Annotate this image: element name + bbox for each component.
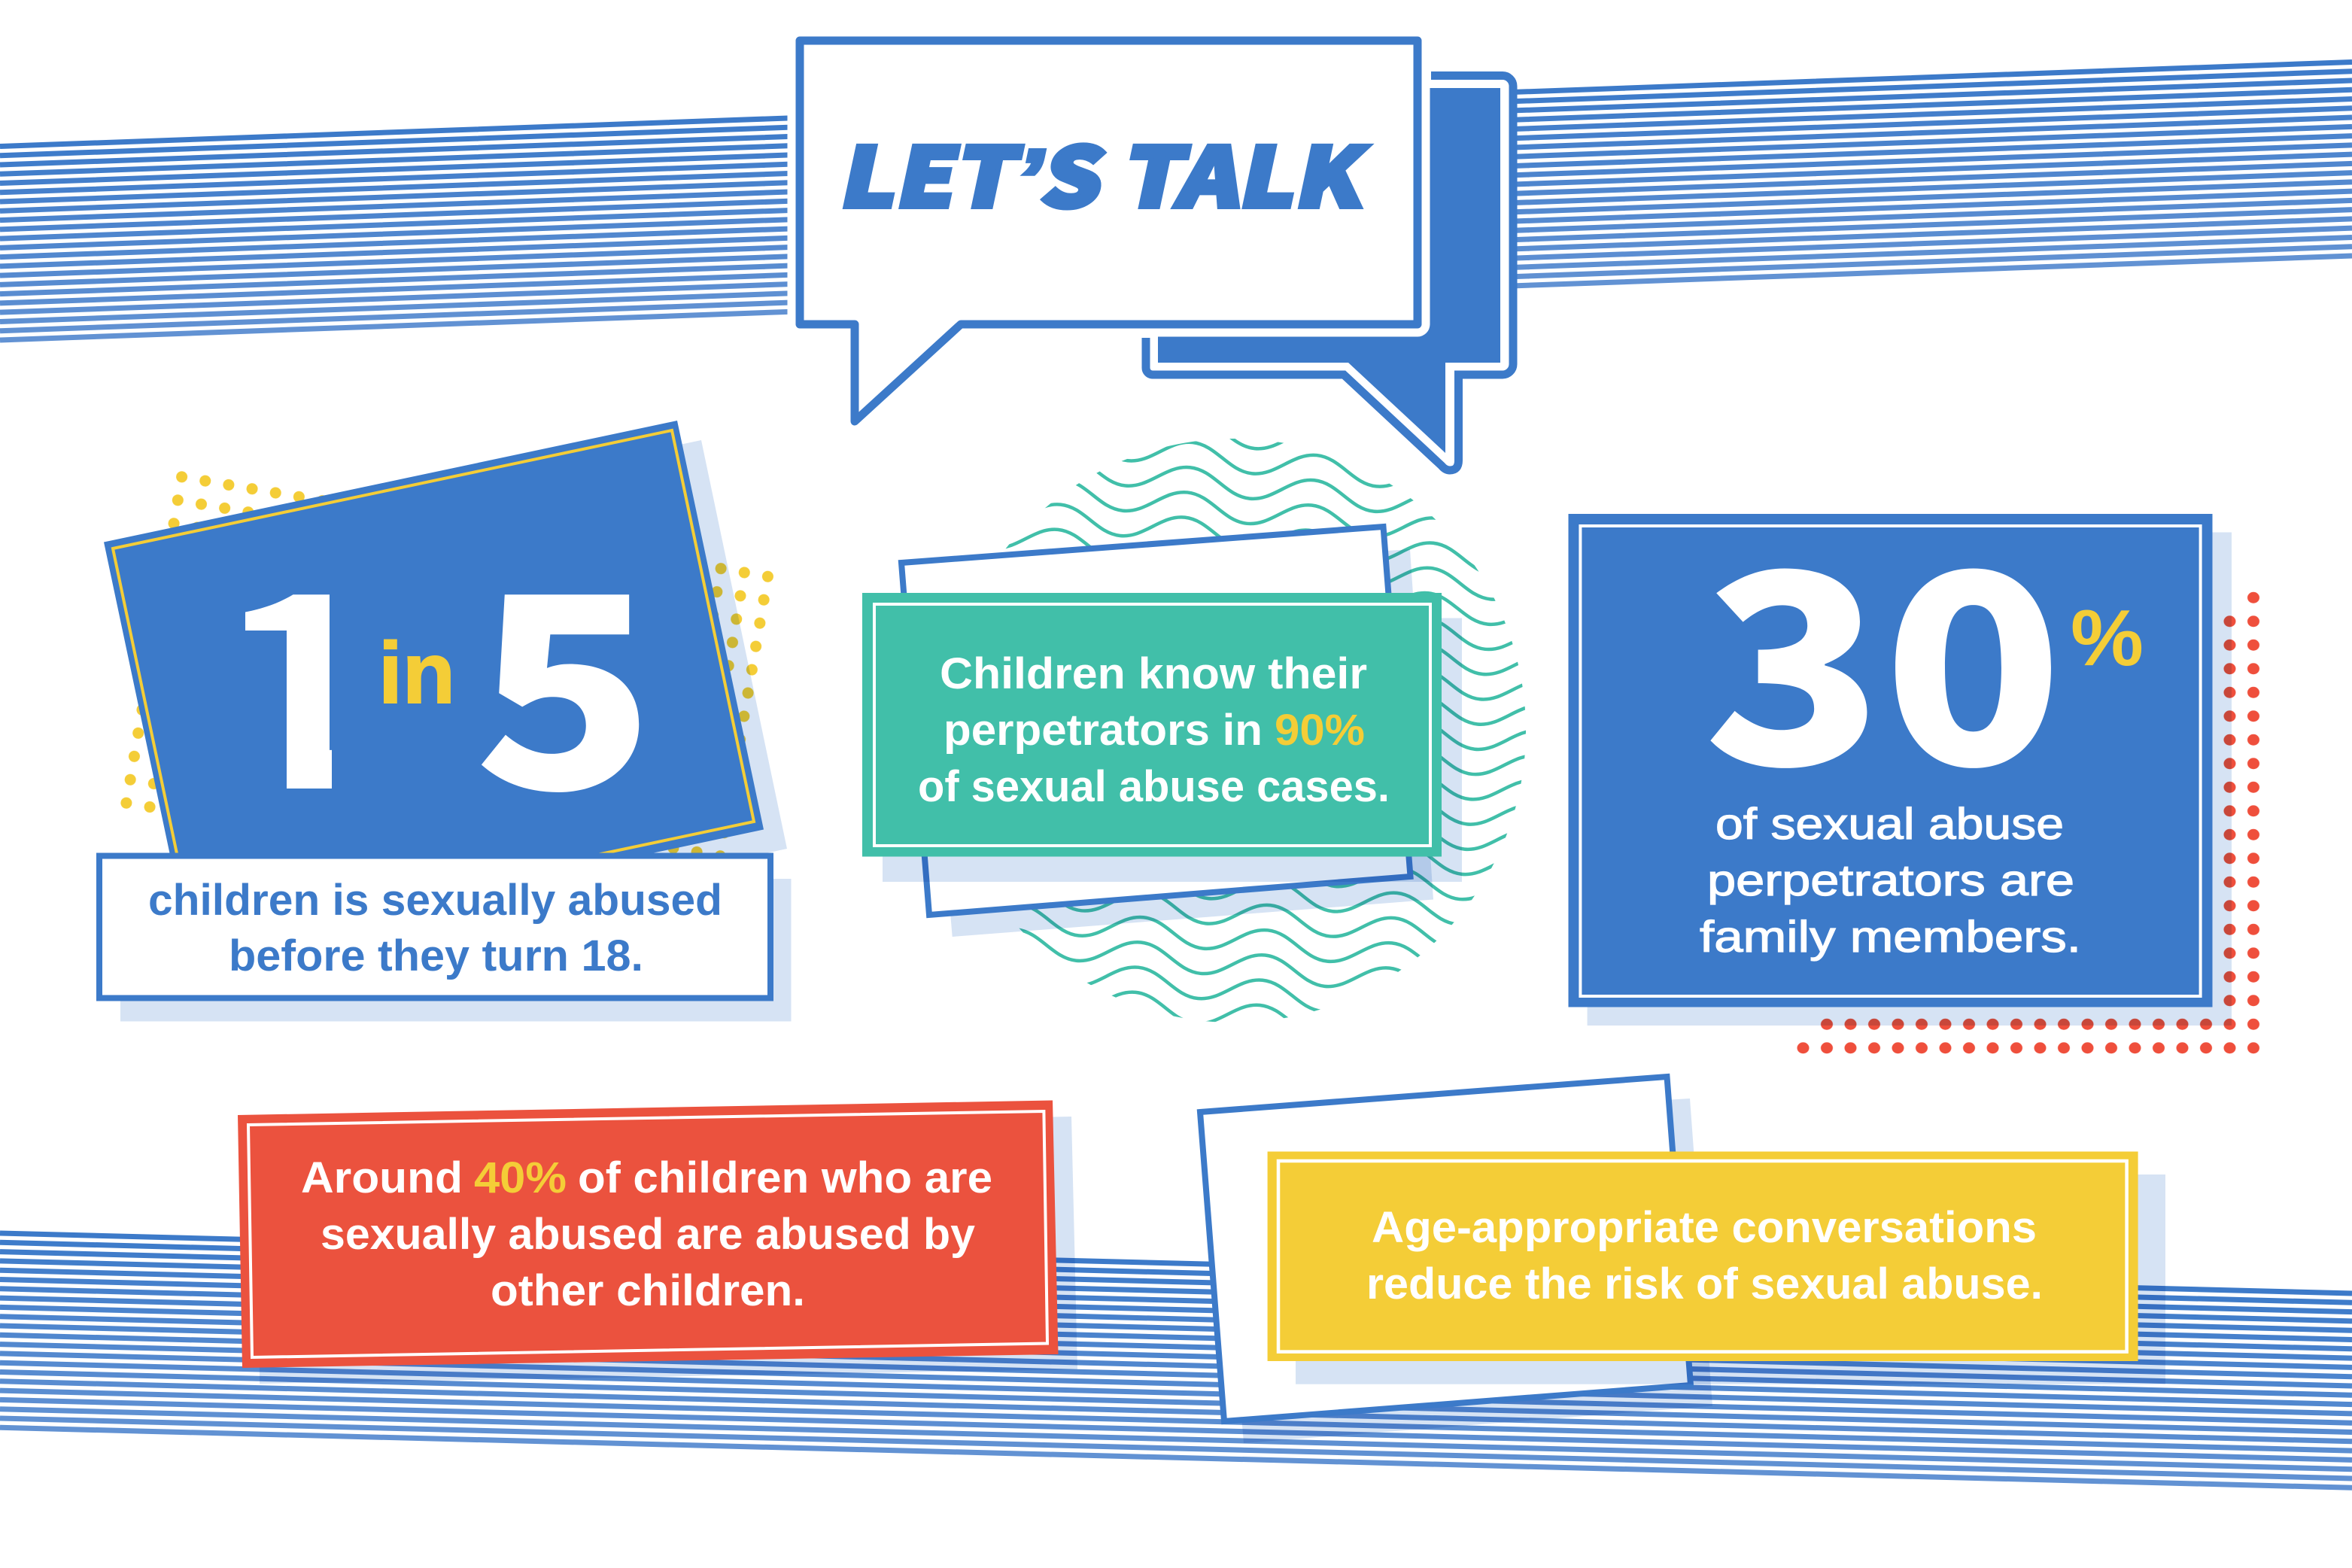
yellow card: [1268, 1151, 2138, 1361]
big number: 30: [1703, 458, 2063, 841]
label text: before they turn 18.: [229, 931, 643, 980]
panel: 30 percent: [1568, 458, 2265, 1060]
teal card text: [918, 649, 1390, 811]
top stripe band: [0, 62, 2352, 340]
decorative yellow dots: [114, 463, 782, 916]
white inner line: [1580, 526, 2201, 996]
card shadow: [128, 440, 787, 971]
white inner line: [1278, 1161, 2127, 1352]
tilted card shadow: [922, 549, 1433, 937]
yellow inner line: [113, 430, 754, 940]
tilted white card: [901, 527, 1410, 915]
red dots: [1791, 586, 2265, 1060]
body text: [1700, 800, 2081, 962]
yellow card text: reduce the risk of sexual abuse.: [1366, 1260, 2043, 1308]
title: LET’S TALK: [832, 111, 1381, 231]
speech bubbles: [800, 41, 1513, 470]
bottom stripe band: [0, 1233, 2352, 1487]
yellow card text: [1366, 1203, 2043, 1308]
teal card text: Children know their: [940, 649, 1367, 698]
number one: 1: [214, 479, 384, 866]
red card text: other children.: [491, 1266, 805, 1315]
body text: family members.: [1700, 913, 2081, 962]
red card text: Around: [301, 1153, 463, 1202]
panel: 1 in 5: [99, 421, 792, 1022]
label shadow: [120, 879, 792, 1022]
red card text: sexually abused are abused by: [321, 1210, 975, 1259]
teal card text: 90%: [1275, 706, 1365, 755]
wave circle: [1005, 439, 1526, 1022]
red card: [238, 1100, 1058, 1368]
yellow card shadow: [1296, 1174, 2165, 1384]
body text: of sexual abuse: [1715, 800, 2064, 849]
body text: perpetrators are: [1707, 856, 2074, 905]
back speech bubble outline: [1146, 75, 1513, 470]
back speech bubble fill: [1158, 88, 1500, 453]
teal card text: of sexual abuse cases.: [918, 762, 1390, 811]
panel: 40 percent: [238, 1100, 1077, 1384]
card shadow: [1588, 533, 2232, 1026]
label text: children is sexually abused: [148, 876, 722, 925]
panel: conversations: [1200, 1077, 2165, 1443]
teal card text: perpetrators in: [944, 706, 1263, 755]
word in: in: [378, 625, 455, 722]
red card shadow: [257, 1117, 1077, 1384]
blue card: [1568, 514, 2212, 1007]
red card text: of children who are: [578, 1153, 992, 1202]
label box: [99, 856, 770, 998]
tilted card shadow: [1217, 1099, 1712, 1443]
red card text: [301, 1153, 992, 1315]
blue card: [104, 421, 764, 951]
red card text: 40%: [474, 1153, 567, 1202]
teal card shadow: [883, 618, 1462, 882]
tilted white card: [1200, 1077, 1691, 1421]
percent sign: %: [2071, 594, 2144, 682]
number five: 5: [474, 479, 655, 866]
teal card: [862, 593, 1442, 856]
yellow card text: Age-appropriate conversations: [1372, 1203, 2037, 1252]
label text: [148, 876, 722, 980]
white inner line: [248, 1111, 1047, 1357]
front speech bubble: [800, 41, 1418, 421]
panel: 90 percent: [862, 439, 1526, 1022]
front speech bubble halo: [800, 41, 1418, 421]
teal card inner line: [874, 604, 1430, 846]
